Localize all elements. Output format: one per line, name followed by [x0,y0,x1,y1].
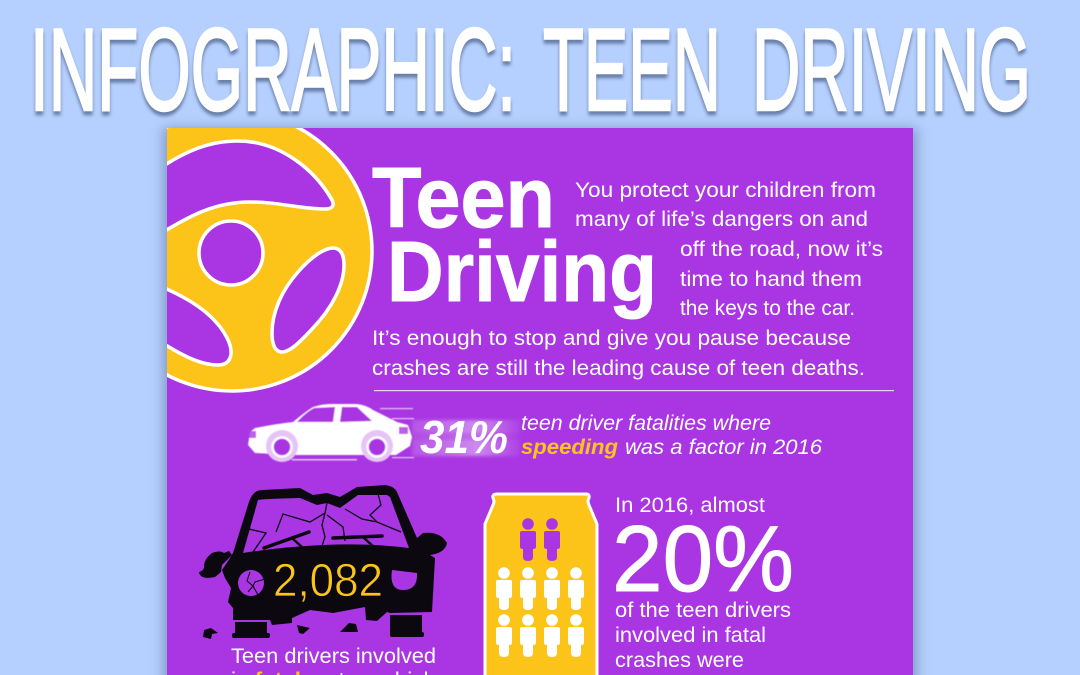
text block: fatal crashes: Teen drivers involved [231,645,436,668]
stat: 31%: 31% [420,411,508,463]
stat: 2,082: 2,082 [273,554,383,606]
text block: alcohol stat: of the teen drivers [615,598,791,622]
text block: intro: It’s enough to stop and give you pause because [372,326,851,350]
icon: purple people [520,518,560,561]
text block: alcohol stat: In 2016, almost [615,493,765,517]
title: TEEN [543,8,721,139]
text block: intro: You protect your children from [575,178,876,202]
text block: intro: crashes are still the leading cause of teen deaths. [372,356,865,380]
text block: alcohol stat: involved in fatal [615,623,766,647]
panel shadow [163,128,917,675]
text block: speeding: was a factor in 2016 [625,436,822,459]
heading: Teen Driving [372,151,657,320]
title: TEEN [543,4,721,135]
text block: intro: many of life’s dangers on and [575,207,868,231]
text block: speeding [521,412,822,459]
icon: speeding car [248,404,414,462]
speed blur band [412,420,522,456]
icon: crashed car [199,485,447,639]
panel: infographic [167,128,913,675]
text block: alcohol stat [612,493,794,672]
heading: Teen Driving: Driving [387,225,657,320]
text block: intro: off the road, now it’s [680,237,883,261]
text block: intro: the keys to the car. [680,296,855,320]
heading: Teen Driving: Teen [372,151,555,246]
icon: can with people [485,494,597,675]
icon: white people [496,567,584,657]
text block: alcohol stat: crashes were [615,648,744,672]
title: INFOGRAPHIC: [30,8,516,139]
icon: steering wheel [167,128,374,393]
text block: speeding: teen driver fatalities where [521,412,771,435]
text block: speeding: speeding [521,436,618,459]
text block: intro [372,178,883,380]
title: INFOGRAPHIC: [30,4,516,135]
text block: intro: time to hand them [680,267,862,291]
text block: alcohol stat: 20% [612,506,794,611]
